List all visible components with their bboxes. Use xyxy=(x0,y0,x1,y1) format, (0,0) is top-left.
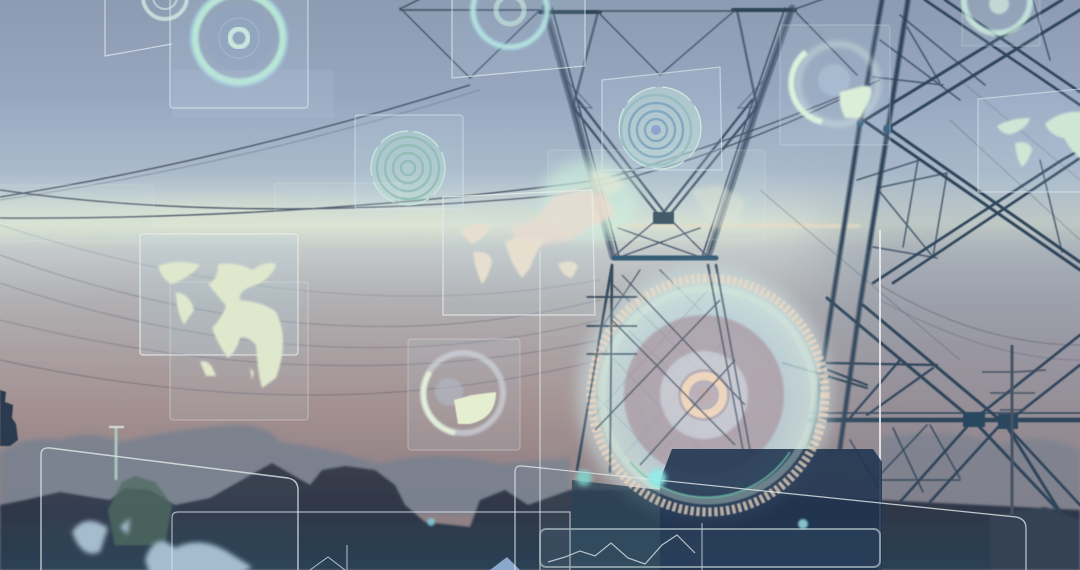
bottom-left panel with cloud map xyxy=(41,448,298,570)
digital panel: globe top right xyxy=(962,0,1040,46)
digital panel: sonar target xyxy=(355,115,463,209)
digital panel: central sonar xyxy=(602,67,722,170)
small utility pole xyxy=(982,345,1046,515)
tree at left edge xyxy=(0,390,18,446)
large radial target rings xyxy=(591,278,825,512)
faint panels on horizon xyxy=(0,150,765,241)
pylon lattice over halo xyxy=(577,265,750,472)
bottom-centre wide panel xyxy=(172,512,570,570)
digital panel: map right edge xyxy=(978,88,1080,192)
tower base dark block xyxy=(570,480,660,570)
digital panel: globe circle upper right xyxy=(780,25,890,145)
right pylon xyxy=(783,0,1080,515)
distant clouds xyxy=(0,425,1080,515)
dark building block xyxy=(660,449,882,570)
large radial halo xyxy=(577,267,833,523)
digital panels: large world map xyxy=(140,234,308,420)
digital panel: globe lower centre xyxy=(408,339,520,450)
map glow behind centre panel xyxy=(510,160,745,248)
line chart panel xyxy=(540,523,880,570)
digital panel: centre world map xyxy=(443,190,595,315)
street lamp xyxy=(109,427,124,480)
large vertical overlay panel xyxy=(540,230,880,570)
power lines xyxy=(0,80,1080,395)
digital panel: top-left target xyxy=(105,0,308,108)
digital panel: top ring xyxy=(452,0,585,78)
faint data bar panel xyxy=(172,70,334,118)
ground silhouette with houses and trees xyxy=(0,463,1080,570)
long angled panel at lower right xyxy=(515,466,1026,570)
centre pylon xyxy=(400,0,857,472)
glowing lights xyxy=(427,469,808,529)
